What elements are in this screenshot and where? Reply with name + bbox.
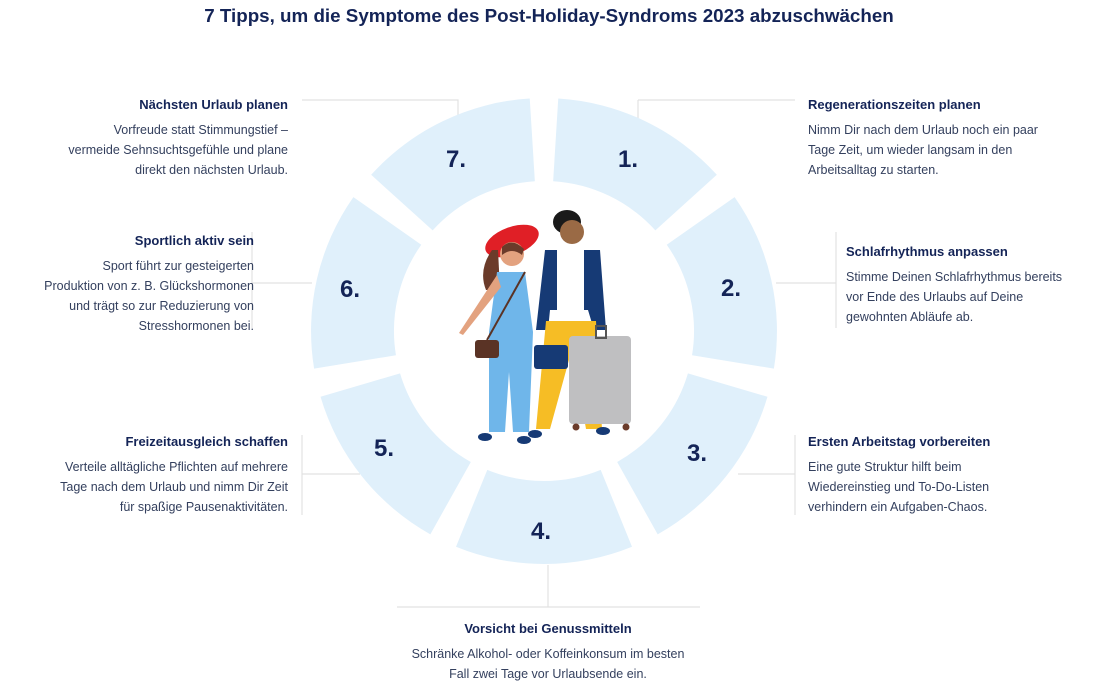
text block 4: Schränke Alkohol- oder Koffeinkonsum im besten bbox=[412, 647, 684, 661]
text block 4: Vorsicht bei Genussmitteln bbox=[464, 621, 632, 636]
text block 1: Nimm Dir nach dem Urlaub noch ein paar bbox=[808, 123, 1038, 137]
text block 4 bbox=[412, 621, 684, 681]
connector lines bbox=[252, 100, 836, 607]
text block 6: Sport führt zur gesteigerten bbox=[103, 259, 254, 273]
illustration: travelling couple bbox=[459, 210, 631, 444]
text block 2: Stimme Deinen Schlafrhythmus bereits bbox=[846, 270, 1062, 284]
text block 7: vermeide Sehnsuchtsgefühle und plane bbox=[68, 143, 288, 157]
text block 2: Schlafrhythmus anpassen bbox=[846, 244, 1008, 259]
text block 1: Arbeitsalltag zu starten. bbox=[808, 163, 939, 177]
text block 7 bbox=[68, 97, 288, 177]
text block 2: vor Ende des Urlaubs auf Deine bbox=[846, 290, 1023, 304]
segment numbers: 5. bbox=[374, 435, 394, 462]
segment numbers bbox=[340, 146, 741, 545]
text block 2 bbox=[846, 244, 1062, 324]
text block 1: Regenerationszeiten planen bbox=[808, 97, 981, 112]
text block 6: Sportlich aktiv sein bbox=[135, 233, 254, 248]
text block 3: Ersten Arbeitstag vorbereiten bbox=[808, 434, 990, 449]
text block 7: Vorfreude statt Stimmungstief – bbox=[114, 123, 288, 137]
segment numbers: 2. bbox=[721, 275, 741, 302]
text block 3 bbox=[808, 434, 990, 514]
text block 6: und trägt so zur Reduzierung von bbox=[69, 299, 254, 313]
segment numbers: 6. bbox=[340, 276, 360, 303]
text block 5: Freizeitausgleich schaffen bbox=[125, 434, 288, 449]
text block 1 bbox=[808, 97, 1038, 177]
text block 5: für spaßige Pausenaktivitäten. bbox=[120, 500, 288, 514]
segment numbers: 1. bbox=[618, 146, 638, 173]
text block 3: Eine gute Struktur hilft beim bbox=[808, 460, 962, 474]
ring segments bbox=[297, 83, 791, 564]
text block 6 bbox=[44, 233, 254, 333]
text block 2: gewohnten Abläufe ab. bbox=[846, 310, 973, 324]
text block 5: Tage nach dem Urlaub und nimm Dir Zeit bbox=[60, 480, 288, 494]
text block 6: Stresshormonen bei. bbox=[139, 319, 254, 333]
text block 7: direkt den nächsten Urlaub. bbox=[135, 163, 288, 177]
text block 5: Verteile alltägliche Pflichten auf mehrere bbox=[65, 460, 288, 474]
text block 1: Tage Zeit, um wieder langsam in den bbox=[808, 143, 1012, 157]
text block 3: Wiedereinstieg und To-Do-Listen bbox=[808, 480, 989, 494]
text block 6: Produktion von z. B. Glückshormonen bbox=[44, 279, 254, 293]
title: 7 Tipps, um die Symptome des Post-Holiday-Syndroms 2023 abzuschwächen bbox=[204, 5, 894, 26]
segment numbers: 4. bbox=[531, 518, 551, 545]
text block 4: Fall zwei Tage vor Urlaubsende ein. bbox=[449, 667, 647, 681]
text block 5 bbox=[60, 434, 288, 514]
segment numbers: 3. bbox=[687, 440, 707, 467]
text block 3: verhindern ein Aufgaben-Chaos. bbox=[808, 500, 987, 514]
segment numbers: 7. bbox=[446, 146, 466, 173]
text block 7: Nächsten Urlaub planen bbox=[139, 97, 288, 112]
